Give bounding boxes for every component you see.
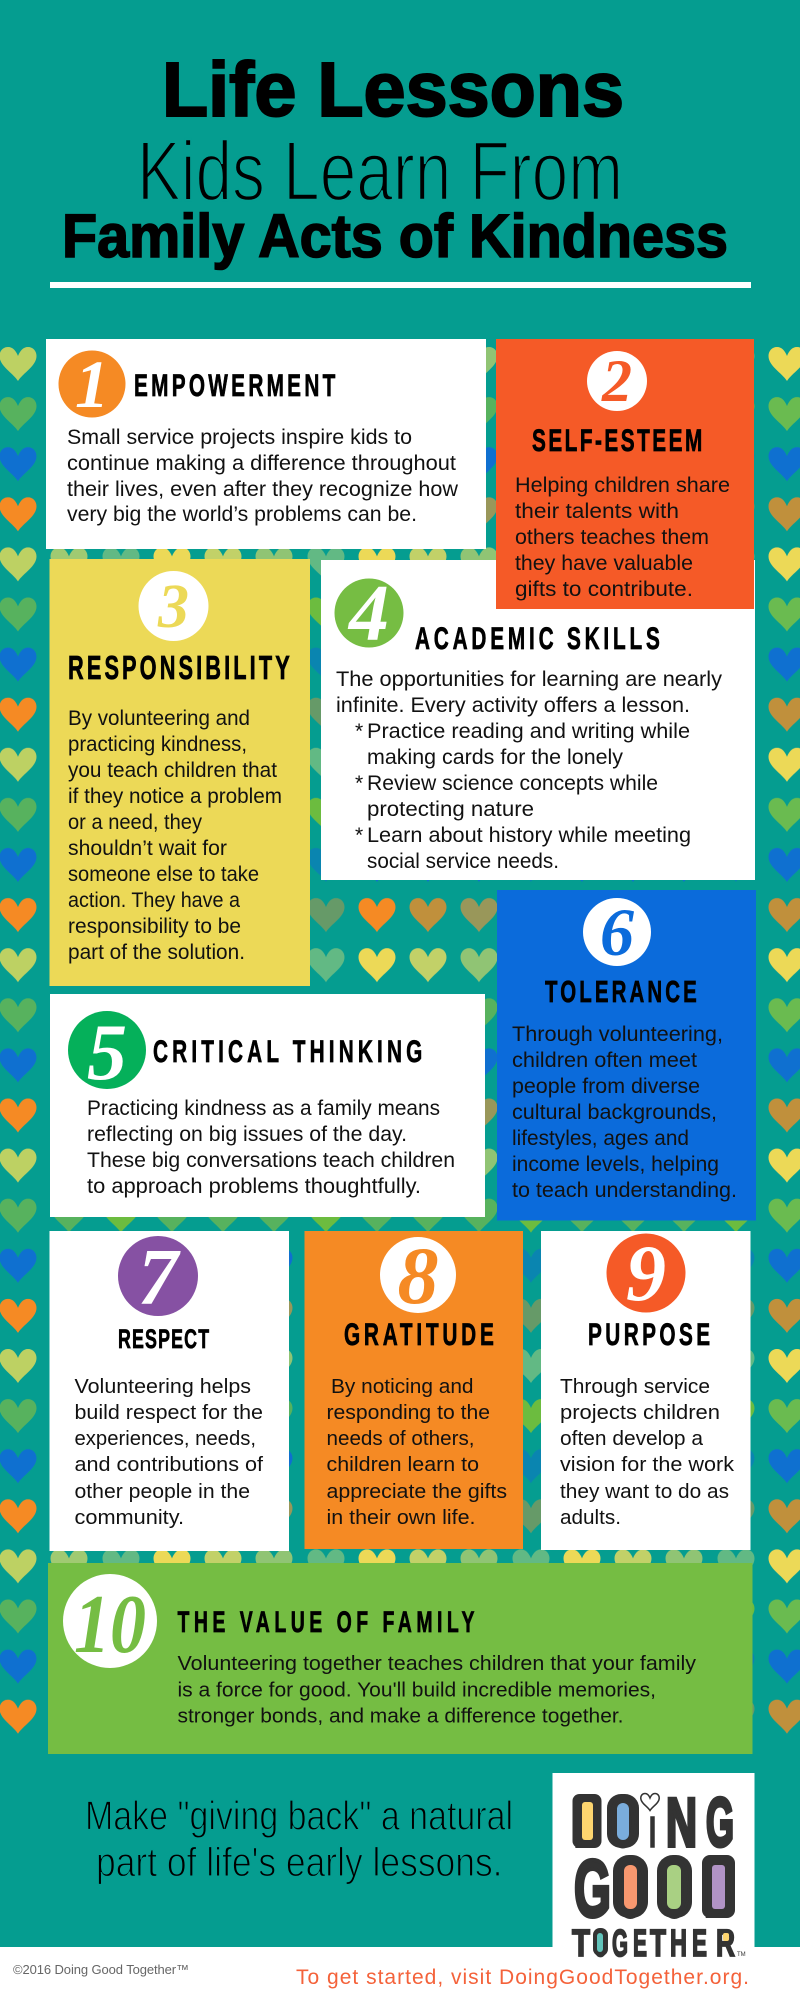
body text: is a force for good. You'll build incredible memories, (178, 1680, 656, 1702)
logo: Doing Good Together: O (615, 1844, 646, 1934)
logo: Doing Good Together (552, 1773, 754, 1965)
title line: Life Lessons: Life Lessons (162, 47, 624, 133)
title line: Kids Learn From: Kids Learn From (137, 124, 623, 218)
body text: shouldn’t wait for (68, 837, 227, 860)
body text (512, 1023, 737, 1202)
call to action: To get started, visit DoingGoodTogether.org. (296, 1966, 749, 1989)
number badge 3 (138, 571, 208, 641)
body text: Volunteering together teaches children that your family (178, 1653, 696, 1675)
logo: Doing Good Together: D (704, 1844, 733, 1934)
number badge 6 (583, 894, 651, 970)
number badge 1 (58, 346, 126, 422)
body text: Helping children share (515, 474, 730, 497)
number badge 7 (118, 1234, 198, 1322)
body text: needs of others, (326, 1428, 474, 1450)
logo: Doing Good Together: G (574, 1844, 611, 1934)
body text: gifts to contribute. (515, 578, 693, 601)
logo: Doing Good Together: G (706, 1784, 734, 1861)
body text: continue making a difference throughout (67, 452, 456, 475)
body text: Review science concepts while (367, 772, 658, 795)
body text: Through volunteering, (512, 1023, 723, 1046)
body text: build respect for the (74, 1402, 263, 1424)
body text: their lives, even after they recognize how (67, 478, 459, 501)
panel 5: critical thinking (50, 994, 485, 1217)
body text: very big the world’s problems can be. (67, 503, 417, 526)
body text: children learn to (326, 1454, 479, 1476)
body text: Practicing kindness as a family means (87, 1097, 440, 1120)
body text: Small service projects inspire kids to (67, 426, 412, 449)
number badge 9 (606, 1230, 686, 1318)
body text: vision for the work (560, 1454, 735, 1476)
body text: their talents with (515, 500, 679, 523)
body text: children often meet (512, 1049, 697, 1072)
logo: Doing Good Together: H (670, 1923, 687, 1965)
body text: often develop a (560, 1428, 704, 1450)
number badge 6: 6 (600, 894, 634, 970)
heading: EMPOWERMENT (134, 368, 335, 403)
body text: lifestyles, ages and (512, 1127, 689, 1150)
footer strip (0, 1947, 800, 2000)
body text (560, 1376, 735, 1529)
body text: * (355, 772, 363, 795)
body text: cultural backgrounds, (512, 1101, 717, 1124)
panel 10: the value of family (48, 1563, 752, 1754)
body text: practicing kindness, (68, 733, 247, 756)
panel 1: empowerment (46, 339, 486, 549)
panel 3: responsibility (50, 559, 310, 986)
number badge 4 (334, 570, 404, 658)
body text: others teaches them (515, 526, 709, 549)
tagline (85, 1792, 513, 1885)
body text: * (355, 824, 363, 847)
panel 2: self-esteem (496, 339, 754, 609)
logo: Doing Good Together: T (650, 1923, 666, 1965)
logo: Doing Good Together: TM (737, 1952, 746, 1958)
body text: experiences, needs, (74, 1428, 256, 1450)
body text: Practice reading and writing while (367, 720, 690, 743)
number badge 3: 3 (157, 573, 189, 641)
body text: making cards for the lonely (367, 746, 623, 769)
logo: Doing Good Together: E (692, 1923, 707, 1965)
heading: RESPONSIBILITY (68, 649, 290, 686)
heading: THE VALUE OF FAMILY (178, 1606, 475, 1639)
heading: SELF-ESTEEM (532, 423, 702, 458)
title (62, 47, 728, 270)
body text: someone else to take (68, 863, 259, 886)
panel 7: respect (50, 1231, 289, 1551)
logo: Doing Good Together: T (572, 1923, 590, 1965)
body text: Through service (560, 1376, 710, 1398)
body text (68, 707, 282, 964)
tagline: part of life's early lessons. (96, 1839, 502, 1885)
number badge 2 (587, 348, 647, 414)
body text: responsibility to be (68, 915, 241, 938)
body text: people from diverse (512, 1075, 700, 1098)
body text: Volunteering helps (74, 1376, 251, 1398)
logo: Doing Good Together: E (633, 1923, 647, 1965)
panel 4: academic skills (321, 560, 755, 880)
body text: to teach understanding. (512, 1179, 737, 1202)
number badge 10: 10 (74, 1578, 146, 1671)
body text: social service needs. (367, 850, 559, 873)
body text: or a need, they (68, 811, 202, 834)
body text (178, 1653, 696, 1728)
panel 8: gratitude (304, 1230, 523, 1549)
body text (336, 668, 723, 873)
body text: they want to do as (560, 1481, 729, 1503)
number badge 5 (68, 1009, 146, 1097)
number badge 1: 1 (75, 346, 109, 422)
body text (515, 474, 730, 601)
body text: part of the solution. (68, 941, 245, 964)
body text: responding to the (326, 1402, 490, 1424)
title line: Family Acts of Kindness: Family Acts of Kindness (62, 202, 728, 270)
body text: other people in the (74, 1481, 250, 1503)
body text: income levels, helping (512, 1153, 719, 1176)
logo: Doing Good Together: R (716, 1923, 735, 1965)
logo: Doing Good Together: O (659, 1844, 690, 1934)
body text: stronger bonds, and make a difference together. (178, 1706, 624, 1728)
body text: community. (74, 1507, 184, 1529)
panel 6: tolerance (497, 890, 756, 1220)
body text: in their own life. (326, 1507, 476, 1529)
logo: Doing Good Together: O (609, 1784, 637, 1861)
tagline: Make "giving back" a natural (85, 1792, 513, 1838)
body text: action. They have a (68, 889, 240, 912)
heading: PURPOSE (588, 1317, 710, 1352)
body text: if they notice a problem (68, 785, 282, 808)
body text: infinite. Every activity offers a lesson. (336, 694, 690, 717)
logo: Doing Good Together: I (649, 1808, 656, 1857)
body text: appreciate the gifts (326, 1481, 507, 1503)
body text: they have valuable (515, 552, 693, 575)
heading: RESPECT (118, 1323, 209, 1354)
body text: to approach problems thoughtfully. (87, 1175, 421, 1198)
body text: adults. (560, 1507, 621, 1529)
body text: and contributions of (74, 1454, 263, 1476)
panel 9: purpose (541, 1230, 750, 1550)
logo: Doing Good Together: G (612, 1923, 628, 1965)
body text: projects children (560, 1402, 720, 1424)
number badge 8: 8 (398, 1230, 438, 1321)
number badge 5: 5 (87, 1009, 127, 1097)
number badge 9: 9 (626, 1230, 666, 1318)
logo: Doing Good Together: O (593, 1923, 608, 1965)
body text: These big conversations teach children (87, 1149, 455, 1172)
body text: you teach children that (68, 759, 277, 782)
body text: By noticing and (331, 1376, 474, 1398)
heading: GRATITUDE (344, 1317, 494, 1352)
logo: Doing Good Together: N (666, 1784, 697, 1861)
heading: ACADEMIC SKILLS (415, 621, 660, 656)
logo: Doing Good Together: D (574, 1784, 600, 1861)
body text: protecting nature (367, 798, 534, 821)
body text: Learn about history while meeting (367, 824, 691, 847)
body text: By volunteering and (68, 707, 250, 730)
heading: CRITICAL THINKING (153, 1034, 422, 1069)
body text: reflecting on big issues of the day. (87, 1123, 407, 1146)
body text (74, 1376, 263, 1529)
copyright: ©2016 Doing Good Together™ (13, 1962, 189, 1977)
number badge 8 (380, 1230, 456, 1321)
heading: TOLERANCE (545, 974, 697, 1009)
number badge 2: 2 (601, 348, 632, 414)
body text (87, 1097, 455, 1198)
body text: The opportunities for learning are nearly (336, 668, 723, 691)
number badge 7: 7 (138, 1234, 181, 1322)
number badge 4: 4 (347, 570, 389, 658)
body text (67, 426, 459, 526)
body text: * (355, 720, 363, 743)
body text (326, 1376, 507, 1529)
